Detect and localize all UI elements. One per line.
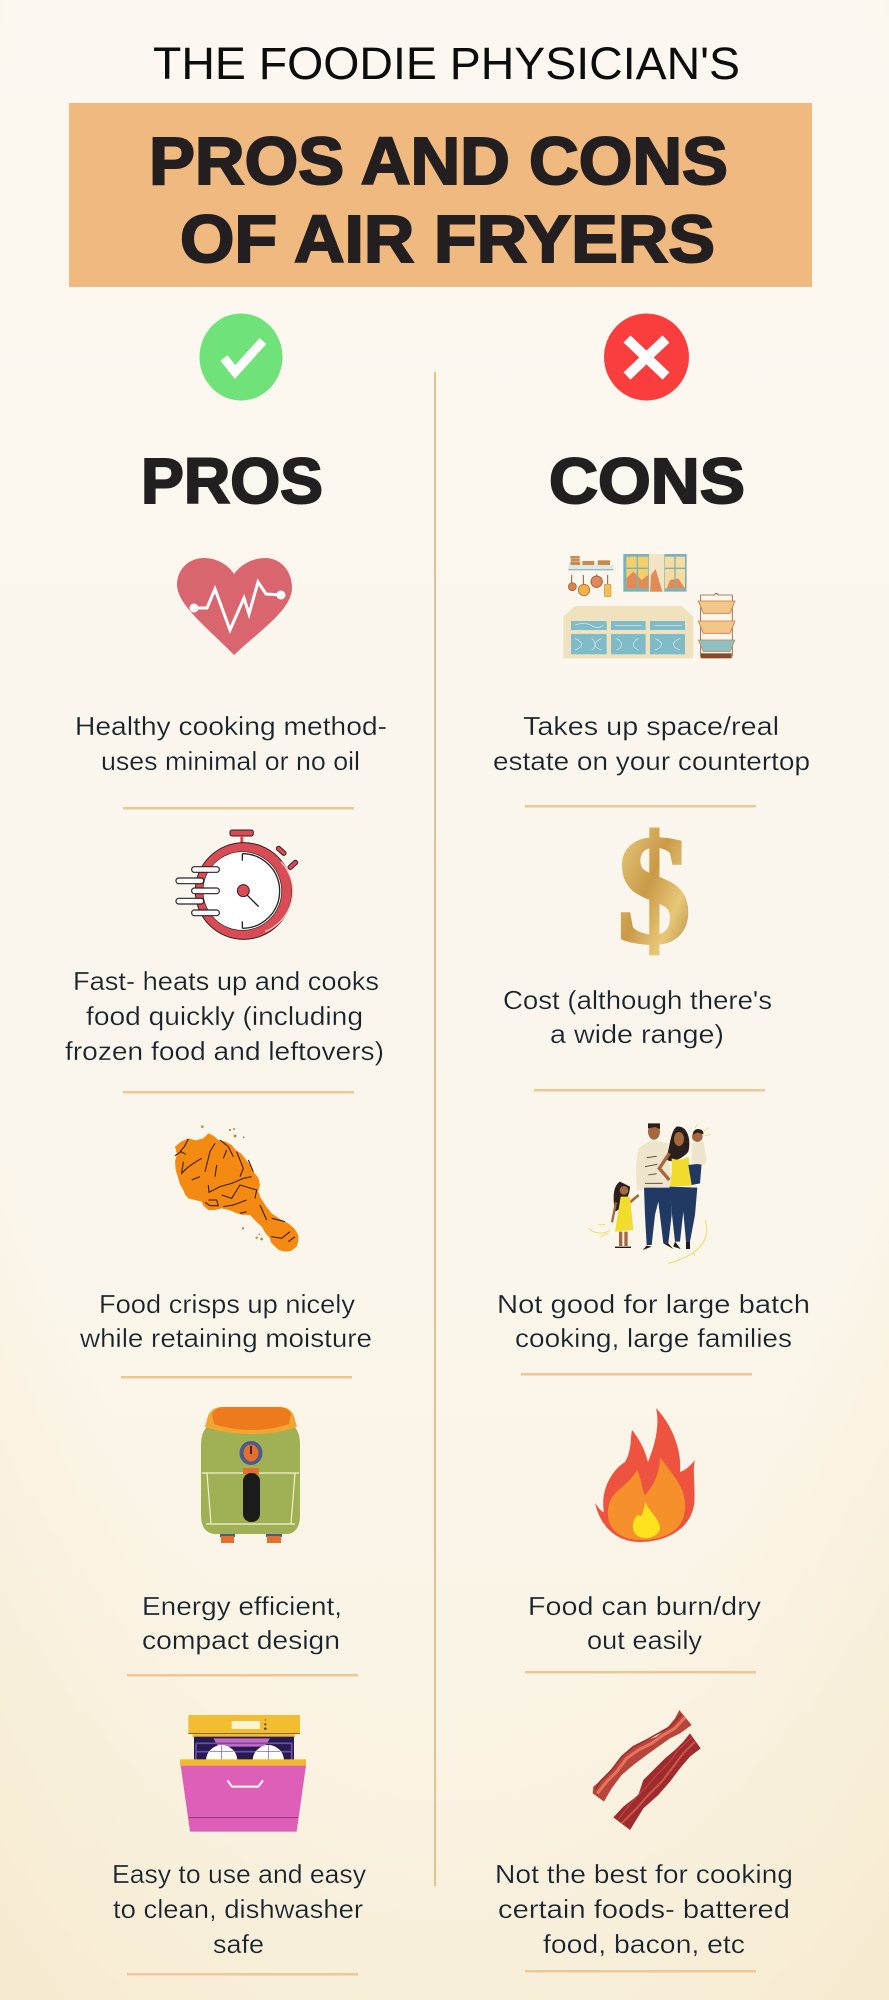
text: Food crisps up nicely — [99, 1289, 355, 1319]
text: estate on your countertop — [493, 746, 810, 776]
text: out easily — [587, 1625, 702, 1655]
pro 1: healthy — [75, 558, 387, 810]
pro 2: fast — [65, 830, 384, 1094]
con 1: space — [493, 554, 810, 808]
con 5: foods — [495, 1710, 793, 1972]
icon: green check — [200, 314, 282, 400]
text — [528, 1591, 761, 1655]
icon: red cross — [604, 314, 689, 400]
title line 2: OF AIR FRYERS — [180, 202, 715, 277]
title line 1: PROS AND CONS — [149, 124, 728, 199]
text: compact design — [142, 1625, 340, 1655]
text — [497, 1289, 810, 1353]
subtitle: The Foodie Physician's: THE FOODIE PHYSICIAN'S — [153, 38, 740, 89]
text — [79, 1289, 372, 1353]
text — [495, 1859, 793, 1959]
icon: stopwatch — [176, 830, 299, 939]
icon: dishwasher — [180, 1715, 306, 1832]
panel: pros — [65, 314, 387, 1976]
panel: cons — [493, 314, 810, 1972]
text: cooking, large families — [515, 1323, 792, 1353]
icon: family — [588, 1123, 711, 1263]
pro 5: easy to clean — [112, 1715, 366, 1976]
icon: bacon — [593, 1710, 701, 1830]
text: food quickly (including — [86, 1001, 363, 1031]
text: food, bacon, etc — [543, 1929, 745, 1959]
center divider line — [434, 372, 436, 1886]
text: Food can burn/dry — [528, 1591, 761, 1621]
pro 3: crisp — [79, 1125, 372, 1378]
text: Energy efficient, — [142, 1591, 342, 1621]
con 2: cost — [503, 803, 772, 1092]
text: frozen food and leftovers) — [65, 1036, 384, 1066]
text — [493, 711, 810, 776]
text: Takes up space/real — [523, 711, 779, 741]
icon: flame — [595, 1408, 695, 1542]
text: Not good for large batch — [497, 1289, 810, 1319]
text: Healthy cooking method- — [75, 711, 387, 741]
text: Cost (although there's — [503, 985, 772, 1015]
text: Fast- heats up and cooks — [73, 966, 379, 996]
text: safe — [213, 1929, 264, 1959]
con 4: burn — [525, 1408, 761, 1674]
icon: kitchen — [563, 554, 735, 658]
icon: gold dollar sign: $ — [617, 803, 691, 976]
icon: heart — [177, 558, 292, 655]
icon: air fryer — [201, 1407, 300, 1543]
text: while retaining moisture — [79, 1323, 372, 1353]
heading: cons: CONS — [549, 445, 745, 517]
con 3: large batches — [497, 1123, 810, 1376]
text — [65, 966, 384, 1066]
text: to clean, dishwasher — [113, 1894, 363, 1924]
heading: pros: PROS — [141, 445, 323, 517]
text — [112, 1859, 366, 1959]
pro 4: energy efficient — [127, 1407, 358, 1676]
text — [503, 985, 772, 1049]
text: Easy to use and easy — [112, 1859, 366, 1889]
text: certain foods- battered — [498, 1894, 790, 1924]
text: uses minimal or no oil — [101, 746, 360, 776]
icon: fried chicken — [175, 1125, 298, 1252]
text — [75, 711, 387, 776]
title banner — [69, 103, 812, 287]
text: a wide range) — [550, 1019, 724, 1049]
text: Not the best for cooking — [495, 1859, 793, 1889]
text — [142, 1591, 342, 1655]
